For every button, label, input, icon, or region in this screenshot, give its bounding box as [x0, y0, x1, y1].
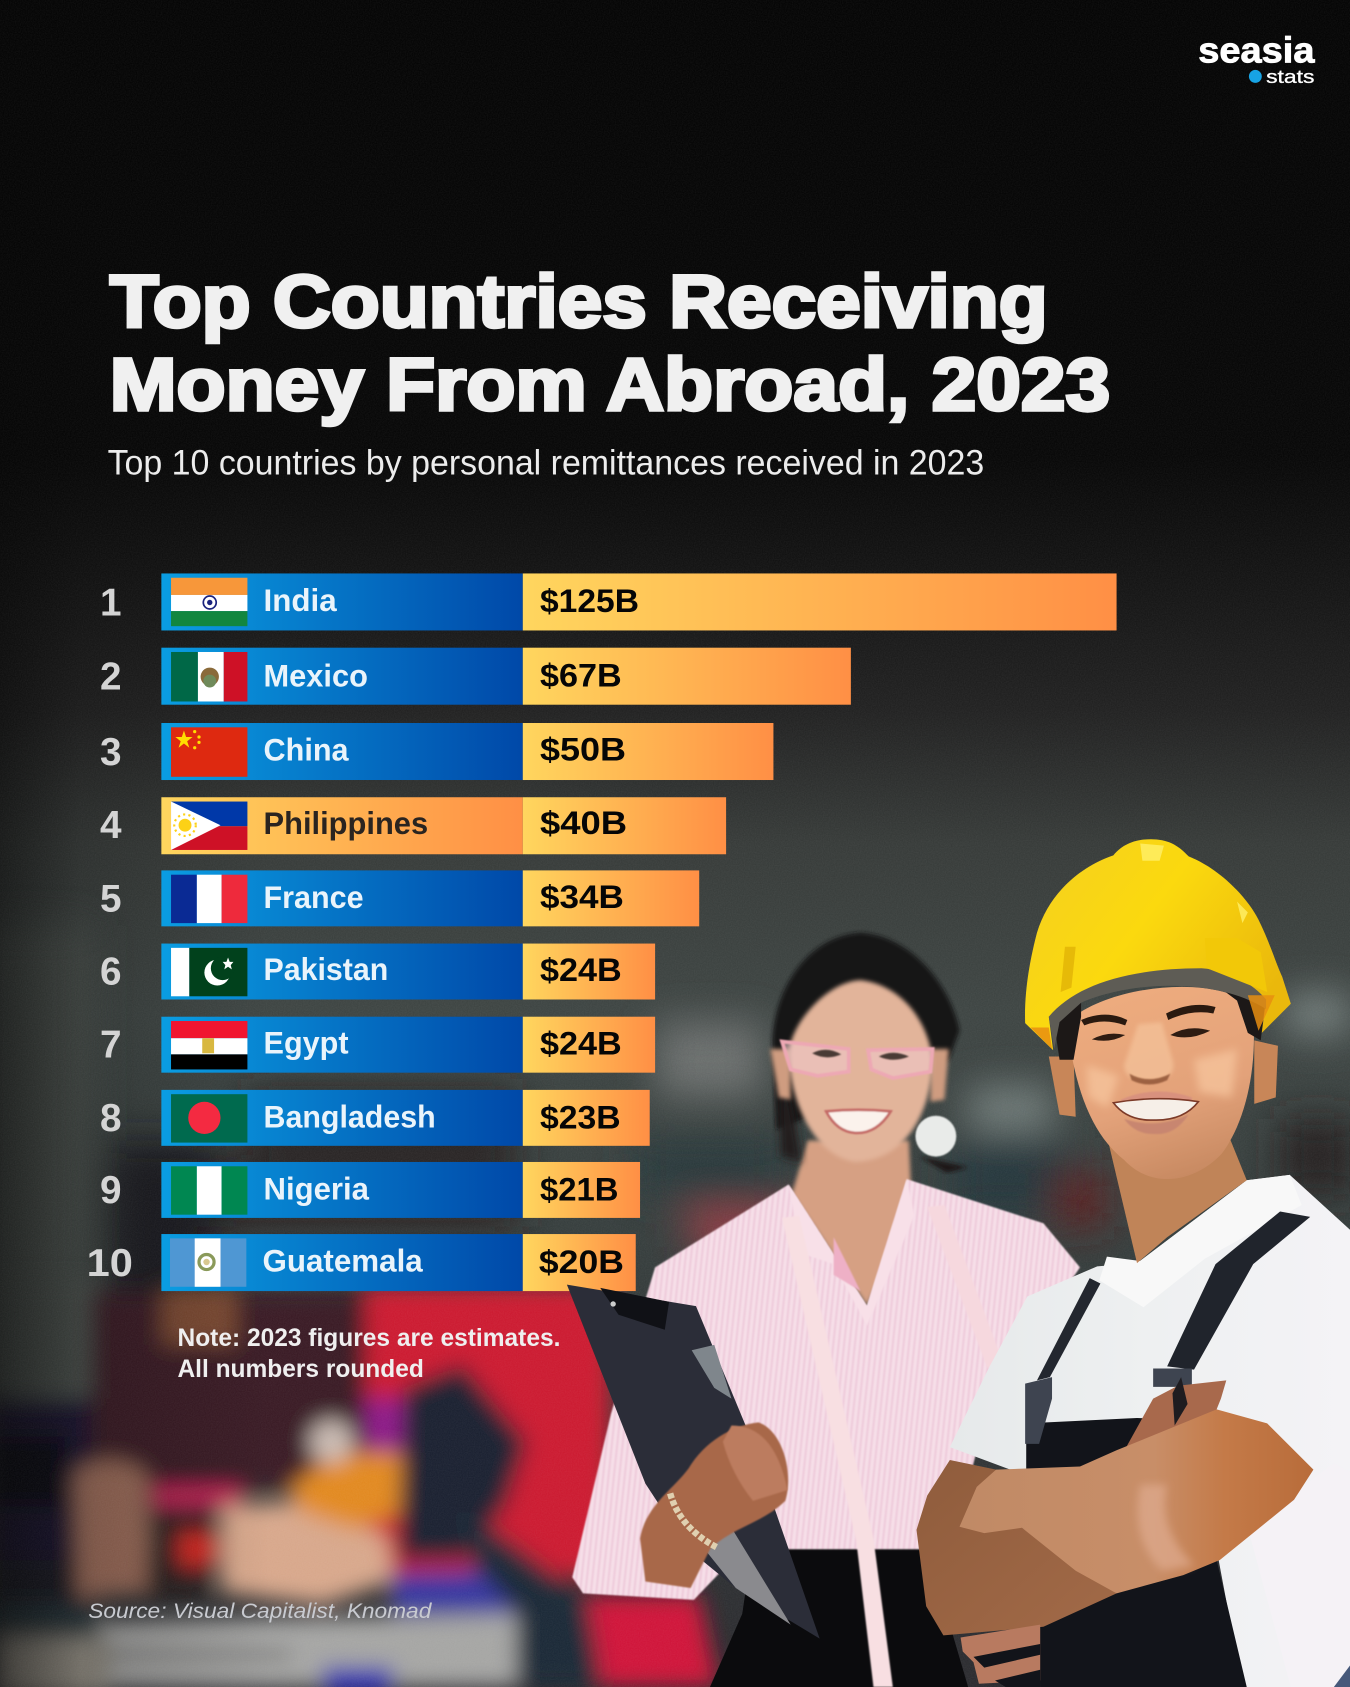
row 7 Egypt: Egypt	[264, 1025, 349, 1060]
title: Money From Abroad, 2023	[110, 343, 1110, 426]
upper lip	[1121, 1091, 1192, 1106]
pink shirt	[572, 1179, 1080, 1600]
row 2 Mexico: Mexico	[264, 658, 368, 693]
row 7 Egypt	[100, 1017, 655, 1073]
row 4 Philippines: 4	[100, 804, 122, 847]
row 5 France: France	[264, 880, 364, 915]
row 2 Mexico	[100, 648, 851, 705]
row 10 Guatemala: 10	[87, 1242, 133, 1285]
overalls	[1026, 1418, 1247, 1687]
row 3 China: $50B	[540, 732, 626, 768]
teeth smile	[1113, 1099, 1198, 1120]
row 4 Philippines	[100, 797, 726, 854]
upper hand	[1126, 1380, 1226, 1452]
white shirt	[950, 1175, 1350, 1687]
row 8 Bangladesh: Bangladesh	[264, 1100, 436, 1135]
skirt	[710, 1541, 968, 1687]
row 9 Nigeria: Nigeria	[264, 1172, 370, 1207]
photo: woman with clipboard	[567, 933, 1080, 1687]
row 7 Egypt: $24B	[540, 1025, 622, 1061]
icon: blue globe dot	[1249, 70, 1262, 83]
title: Top Countries Receiving	[110, 260, 1048, 343]
smile	[826, 1110, 891, 1133]
note: All numbers rounded	[177, 1356, 424, 1383]
glasses	[782, 1041, 933, 1078]
helmet brim band	[1049, 968, 1266, 1049]
eyes	[1092, 1028, 1210, 1041]
row 6 Pakistan	[100, 944, 655, 1000]
earring	[915, 1116, 956, 1157]
row 7 Egypt: 7	[100, 1024, 122, 1067]
neck	[792, 1140, 912, 1306]
row 3 China: 3	[100, 731, 122, 774]
row 3 China	[100, 723, 773, 780]
row 10 Guatemala	[87, 1234, 636, 1291]
row 3 China: China	[264, 733, 349, 768]
row 9 Nigeria	[100, 1162, 640, 1218]
row 5 France: $34B	[540, 879, 624, 915]
brand logo: seasia	[1198, 29, 1315, 70]
near arm	[960, 1409, 1313, 1593]
face highlights	[1086, 1049, 1237, 1108]
ears	[770, 1049, 949, 1102]
row 9 Nigeria: $21B	[540, 1172, 619, 1208]
helmet ridges	[1205, 938, 1267, 992]
hair back	[772, 933, 960, 1130]
row 9 Nigeria: 9	[100, 1169, 122, 1212]
measuring tape	[782, 1216, 893, 1687]
brand logo	[1198, 29, 1315, 87]
lower fingers	[961, 1625, 1040, 1684]
row 8 Bangladesh	[100, 1090, 650, 1146]
row 8 Bangladesh: 8	[100, 1097, 122, 1140]
subtitle: Top 10 countries by personal remittances received in 2023	[108, 442, 984, 482]
row 6 Pakistan: $24B	[540, 952, 622, 988]
source: Source: Visual Capitalist, Knomad	[88, 1599, 432, 1623]
title	[110, 260, 1110, 426]
row 5 France	[100, 870, 699, 926]
back arm	[916, 1460, 1117, 1635]
row 4 Philippines: Philippines	[264, 806, 428, 841]
row 2 Mexico: 2	[100, 656, 122, 699]
row 4 Philippines: $40B	[540, 805, 627, 841]
collar	[788, 1179, 914, 1326]
bar chart: remittances by country	[87, 573, 1117, 1291]
photo: man in hard hat	[916, 839, 1350, 1687]
row 8 Bangladesh: $23B	[540, 1100, 621, 1136]
face	[788, 980, 933, 1162]
row 1 India	[100, 573, 1117, 630]
note: Note: 2023 figures are estimates.	[177, 1325, 560, 1352]
row 5 France: 5	[100, 877, 122, 920]
brand logo: stats	[1266, 66, 1315, 87]
eyes	[812, 1050, 909, 1060]
lower lip	[1124, 1115, 1189, 1134]
neck	[1108, 1130, 1247, 1263]
forearm and hand	[640, 1422, 788, 1588]
hair	[1053, 984, 1266, 1060]
overall buckles	[1025, 1369, 1192, 1444]
helmet brim orange tip	[1031, 995, 1275, 1049]
right strap	[1167, 1211, 1310, 1370]
nose	[1124, 1022, 1173, 1081]
helmet	[1025, 839, 1291, 1050]
elbow highlight	[1138, 1485, 1194, 1571]
ears	[1049, 1040, 1278, 1117]
row 10 Guatemala: Guatemala	[262, 1244, 423, 1279]
face	[1067, 987, 1254, 1179]
row 6 Pakistan: 6	[100, 950, 122, 993]
bracelet	[670, 1493, 716, 1547]
row 6 Pakistan: Pakistan	[264, 952, 388, 987]
left strap	[1037, 1278, 1100, 1380]
row 1 India: $125B	[540, 583, 639, 619]
note	[177, 1325, 560, 1383]
brows	[1081, 1005, 1216, 1025]
row 10 Guatemala: $20B	[539, 1244, 624, 1280]
row 2 Mexico: $67B	[540, 657, 622, 693]
row 1 India: 1	[100, 581, 122, 624]
clipboard	[567, 1285, 820, 1639]
row 1 India: India	[264, 583, 337, 618]
